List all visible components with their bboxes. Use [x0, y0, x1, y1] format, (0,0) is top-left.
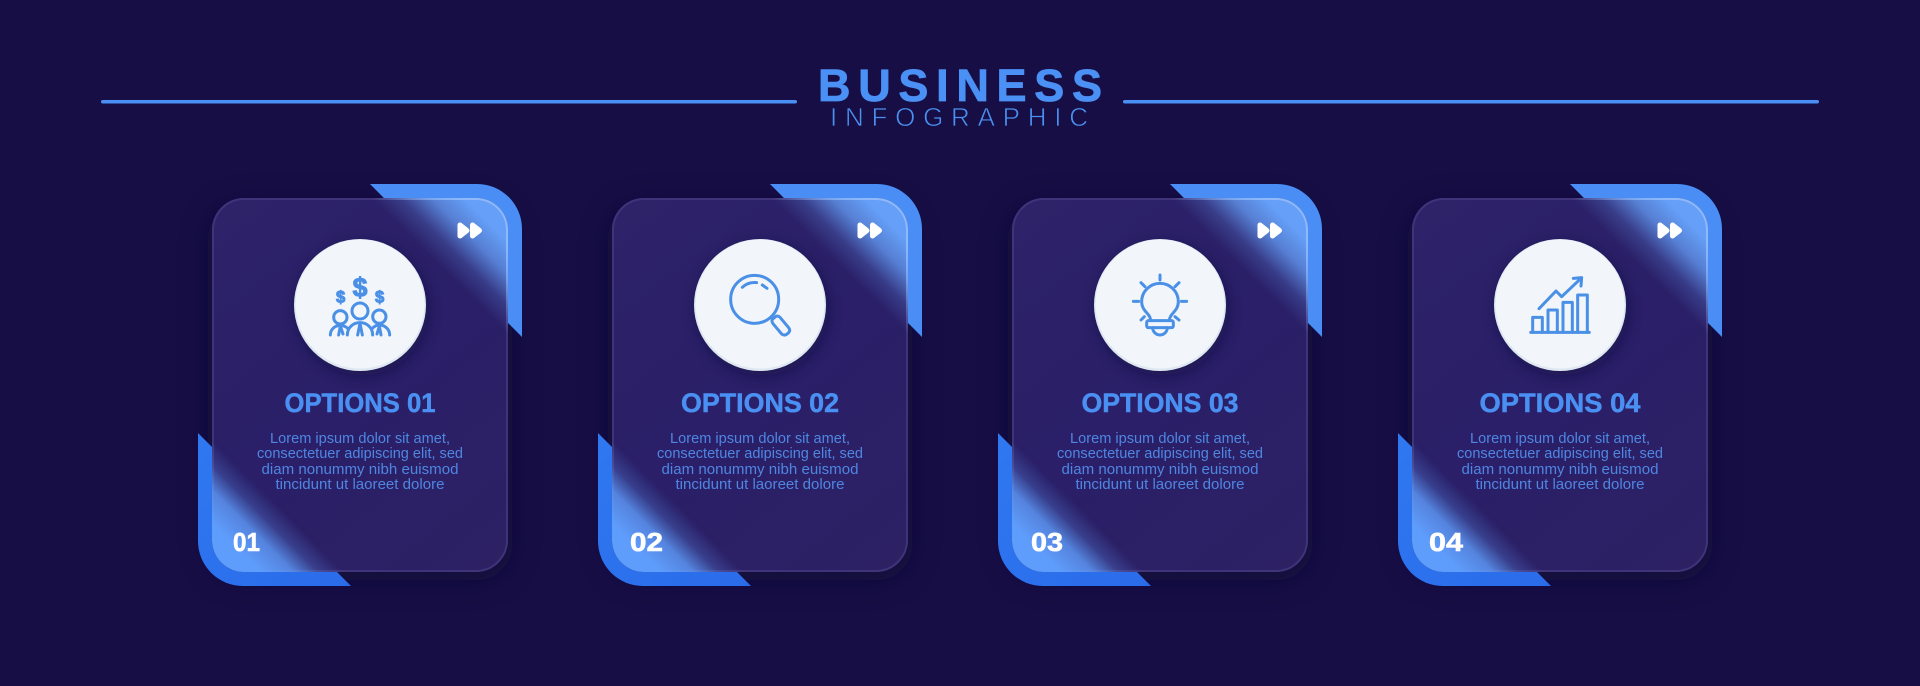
option title: OPTIONS 02: [681, 388, 839, 418]
subheading: INFOGRAPHIC: INFOGRAPHIC: [830, 102, 1088, 132]
description text: tincidunt ut laoreet dolore: [676, 477, 844, 493]
option title: OPTIONS 03: [1082, 388, 1238, 418]
glass highlight top right: [612, 198, 908, 572]
back corner bottom left: [598, 433, 751, 586]
description text: [257, 431, 463, 493]
description text: Lorem ipsum dolor sit amet,: [270, 431, 450, 447]
back corner bottom left: [1398, 433, 1551, 586]
panel: option 3: [998, 184, 1322, 586]
panel: option 1: [198, 184, 522, 586]
icon: light bulb: [1133, 275, 1187, 335]
number: 04: [1429, 527, 1464, 557]
description text: consectetuer adipiscing elit, sed: [257, 446, 463, 462]
icon: team with dollars: [330, 272, 390, 335]
number: 03: [1031, 527, 1063, 557]
description text: [1457, 431, 1663, 493]
glass card: [1012, 198, 1308, 572]
glass card: [612, 198, 908, 572]
icon: double arrow: [860, 225, 880, 236]
glass highlight top right: [1412, 198, 1708, 572]
back corner top right: [1570, 184, 1722, 337]
icon: double arrow: [1660, 225, 1680, 236]
description text: Lorem ipsum dolor sit amet,: [1470, 431, 1650, 447]
description text: consectetuer adipiscing elit, sed: [1057, 446, 1263, 462]
option title: OPTIONS 01: [284, 388, 436, 418]
icon: team with dollars: $: [353, 272, 368, 302]
glass highlight bottom left: [1412, 198, 1708, 572]
circle badge: [294, 239, 428, 375]
description text: tincidunt ut laoreet dolore: [1076, 477, 1244, 493]
icon: team with dollars: $: [375, 288, 385, 307]
icon: growth chart: [1531, 278, 1589, 332]
glass highlight bottom left: [1012, 198, 1308, 572]
option title: OPTIONS 04: [1480, 388, 1640, 418]
icon: double arrow: [1260, 225, 1280, 236]
description text: consectetuer adipiscing elit, sed: [1457, 446, 1663, 462]
icon: magnifying glass: [731, 275, 790, 335]
description text: diam nonummy nibh euismod: [262, 462, 458, 478]
icon: team with dollars: $: [336, 288, 346, 307]
description text: consectetuer adipiscing elit, sed: [657, 446, 863, 462]
circle badge: [694, 239, 828, 375]
card shadow: [608, 204, 912, 580]
glass card: [212, 198, 508, 572]
glass highlight bottom left: [212, 198, 508, 572]
circle badge: [1094, 239, 1228, 375]
circle badge: [1494, 239, 1628, 375]
glass card: [1412, 198, 1708, 572]
glass highlight bottom left: [612, 198, 908, 572]
number: 02: [630, 527, 663, 557]
description text: tincidunt ut laoreet dolore: [1476, 477, 1644, 493]
heading: BUSINESS: BUSINESS: [818, 60, 1102, 111]
back corner top right: [770, 184, 922, 337]
icon: double arrow: [460, 225, 480, 236]
panel: option 4: [1398, 184, 1722, 586]
back corner top right: [1170, 184, 1322, 337]
description text: Lorem ipsum dolor sit amet,: [1070, 431, 1250, 447]
back corner bottom left: [198, 433, 351, 586]
description text: diam nonummy nibh euismod: [1462, 462, 1658, 478]
glass highlight top right: [1012, 198, 1308, 572]
card shadow: [208, 204, 512, 580]
title: [818, 60, 1102, 132]
description text: tincidunt ut laoreet dolore: [276, 477, 444, 493]
description text: diam nonummy nibh euismod: [662, 462, 858, 478]
description text: Lorem ipsum dolor sit amet,: [670, 431, 850, 447]
description text: diam nonummy nibh euismod: [1062, 462, 1258, 478]
description text: [657, 431, 863, 493]
glass highlight top right: [212, 198, 508, 572]
back corner bottom left: [998, 433, 1151, 586]
card shadow: [1408, 204, 1712, 580]
panel: option 2: [598, 184, 922, 586]
card shadow: [1008, 204, 1312, 580]
description text: [1057, 431, 1263, 493]
back corner top right: [370, 184, 522, 337]
number: 01: [233, 527, 260, 557]
